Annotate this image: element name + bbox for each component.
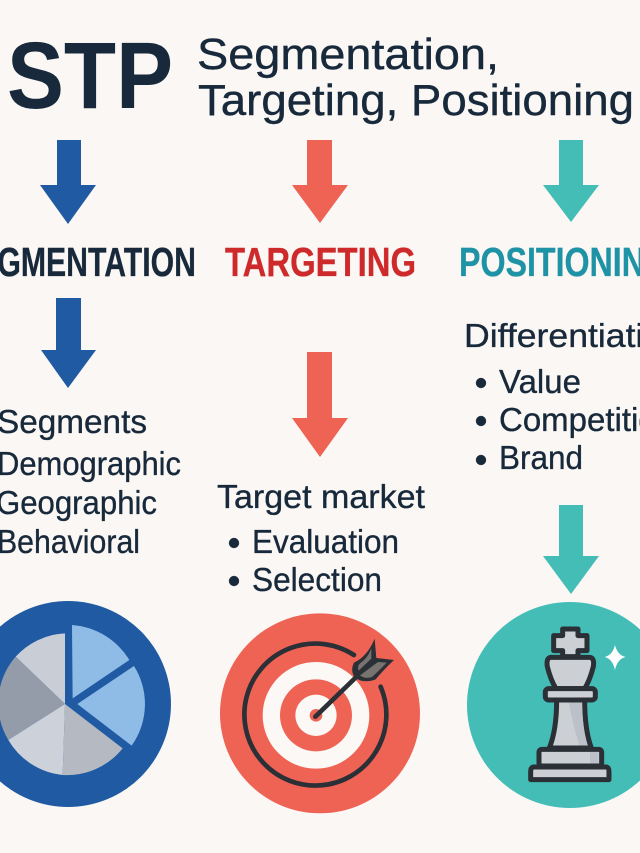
text block: target market: Selection: [252, 561, 382, 598]
arrow: title to targeting: [292, 140, 348, 223]
text block: differentiation: [464, 317, 640, 476]
arrow: segmentation to segments: [41, 298, 96, 388]
arrow: title to segmentation: [40, 140, 96, 224]
text block: target market: Target market: [217, 478, 425, 515]
title: STP: STP: [7, 23, 173, 129]
text block: segments: Demographic: [0, 445, 181, 482]
text block: segments: Segments: [0, 403, 147, 440]
subtitle: Targeting, Positioning: [198, 76, 634, 125]
icon: target with arrow: [220, 613, 420, 813]
text block: differentiation: Brand: [499, 439, 583, 476]
icon: pie chart: [0, 601, 171, 807]
text block: target market: [217, 478, 425, 598]
arrow: positioning to chess icon: [543, 505, 599, 594]
arrow: title to positioning: [543, 140, 599, 222]
text block: segments: Behavioral: [0, 523, 140, 560]
subtitle: [197, 30, 634, 125]
text block: segments: Geographic: [0, 484, 157, 521]
text block: differentiation: Value: [499, 363, 581, 400]
text block: target market: Evaluation: [252, 523, 399, 560]
heading: targeting: TARGETING: [225, 239, 416, 285]
arrow: targeting to target market: [292, 352, 348, 457]
text block: segments: [0, 403, 181, 560]
subtitle: Segmentation,: [197, 30, 499, 79]
icon: chess king: [467, 602, 640, 808]
